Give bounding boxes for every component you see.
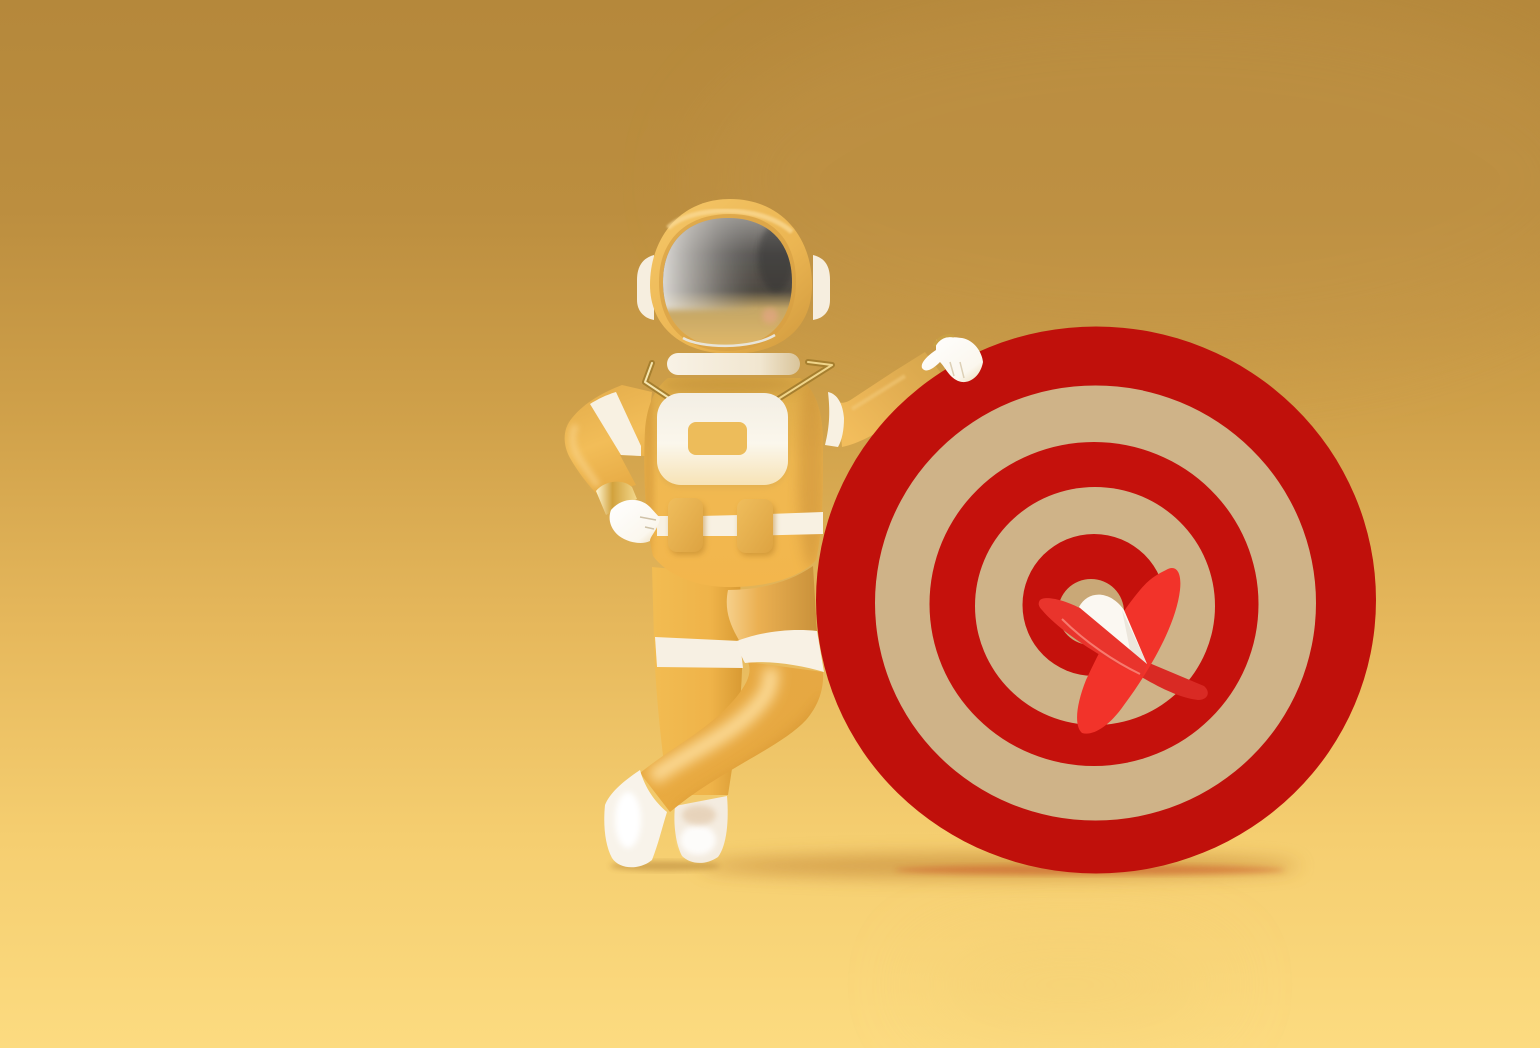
right glove on target rim: [922, 335, 983, 382]
ear right: [813, 255, 830, 320]
chest pack panel: [688, 422, 747, 455]
left arm on hip: [565, 385, 652, 495]
inner beige ring: [975, 487, 1215, 725]
floor shadow: [610, 854, 1300, 878]
belt pouch right: [737, 499, 775, 556]
front thigh: [727, 566, 817, 642]
front lower leg: [640, 662, 826, 812]
neck collar: [667, 353, 800, 375]
middle red ring: [930, 442, 1258, 766]
astronaut: [565, 199, 950, 867]
right shoulder band: [825, 392, 844, 447]
outer red ring: [816, 326, 1376, 874]
belt: [657, 498, 823, 556]
torso: [642, 370, 826, 587]
fin vertical: [1077, 568, 1180, 734]
front shoe: [604, 770, 667, 867]
outer beige ring: [875, 386, 1316, 820]
ear left: [637, 255, 654, 320]
back leg with white band: [652, 567, 743, 795]
fin upper left: [1039, 598, 1147, 676]
gold straps: [645, 362, 832, 401]
chest pack: [657, 393, 788, 488]
helmet shell: [650, 199, 812, 354]
white dart tip: [1079, 595, 1147, 664]
helmet: [637, 199, 830, 355]
dart: [1039, 568, 1208, 734]
right arm resting on target: [838, 352, 950, 447]
inner red ring: [1022, 534, 1166, 676]
gold wrist cuff: [596, 482, 637, 515]
back shoe: [674, 796, 728, 863]
front leg white band: [737, 630, 824, 672]
target: [816, 326, 1376, 874]
bullseye hole: [1058, 579, 1124, 645]
belt pouch left: [668, 498, 705, 555]
visor: [663, 218, 792, 345]
left glove: [610, 500, 660, 543]
fin lower right: [1138, 660, 1208, 700]
